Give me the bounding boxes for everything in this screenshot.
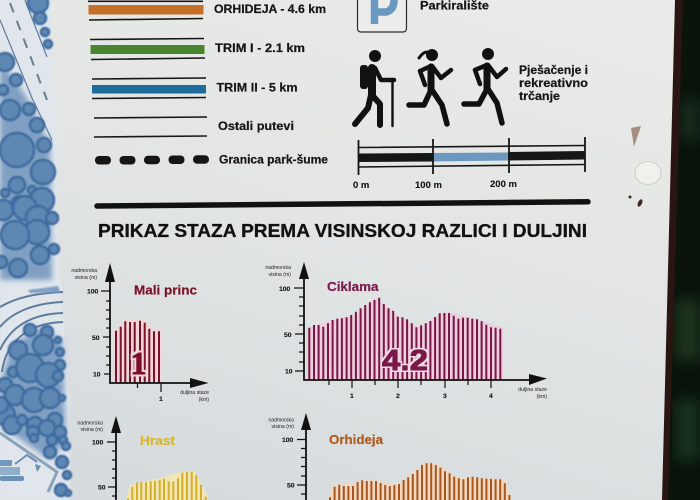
axes <box>77 416 121 500</box>
icon: female runner <box>409 49 451 124</box>
chart: Orhideja <box>268 413 512 500</box>
legend: Ostali putevi: Ostali putevi <box>218 121 294 133</box>
panel: walking and running <box>355 48 588 126</box>
axes: 100 <box>92 440 104 446</box>
icon: hiker <box>355 50 394 126</box>
axes <box>265 262 547 400</box>
scale bar <box>353 137 585 191</box>
axes: 4 <box>489 393 493 400</box>
scale bar: 100 m <box>415 180 442 191</box>
chart: Mali princ <box>71 263 209 403</box>
axes: visina (m) <box>75 275 97 281</box>
legend: Granica park-šume <box>95 154 328 166</box>
legend: Trim I <box>90 38 305 60</box>
scale bar: 0 m <box>353 180 369 191</box>
legend: Trim I: TRIM I - 2.1 km <box>215 43 305 55</box>
axes: nadmorska <box>265 265 291 271</box>
axes: nadmorska <box>77 420 103 426</box>
trail length: 4.2 <box>382 345 428 377</box>
axes: nadmorska <box>268 418 294 424</box>
axes: (km) <box>537 394 547 400</box>
chart: Ciklama <box>265 262 547 400</box>
parking label: Parkiralište <box>420 0 489 12</box>
map trees <box>0 0 71 496</box>
panel: map excerpt <box>0 0 71 500</box>
icon: excavator <box>0 455 41 481</box>
icon: parking sign <box>358 0 406 32</box>
axes <box>71 263 209 403</box>
axes: duljina staze <box>180 390 209 396</box>
panel: walking and running: rekreativno <box>519 78 588 90</box>
axes: 50 <box>92 335 100 342</box>
panel: walking and running: trčanje <box>519 91 560 103</box>
legend: Trim II <box>92 78 298 98</box>
axes: visina (m) <box>269 272 291 278</box>
axes: 10 <box>93 372 101 378</box>
axes: duljina staze <box>518 387 547 393</box>
axes: 50 <box>98 484 106 492</box>
legend: Trim II: TRIM II - 5 km <box>216 82 298 94</box>
scale bar: 200 m <box>490 179 517 190</box>
chart title: Hrast <box>140 434 176 448</box>
axes: 1 <box>350 393 354 400</box>
axes: 10 <box>285 368 293 376</box>
axes: 2 <box>396 393 400 400</box>
panel: trail legend <box>88 1 328 166</box>
rivet and stains <box>628 126 661 207</box>
label: activity: Pješačenje i <box>519 65 588 77</box>
axes: 50 <box>287 482 295 490</box>
axes <box>268 413 311 500</box>
map roads <box>0 0 63 492</box>
map tree mass <box>0 60 66 460</box>
chart title: Orhideja <box>329 433 384 447</box>
divider bar <box>97 202 588 206</box>
axes: (km) <box>199 397 209 403</box>
chart: Hrast <box>77 416 208 500</box>
axes: 100 <box>87 288 99 296</box>
panel: parking <box>358 0 489 32</box>
axes: 50 <box>284 332 292 339</box>
axes: visina (m) <box>272 424 294 430</box>
axes: nadmorska <box>71 268 97 274</box>
chart title: Mali princ <box>134 284 197 298</box>
legend: Granica park-šume: Granica park-šume <box>219 154 328 166</box>
axes: 100 <box>279 286 291 293</box>
icon: male runner <box>464 48 506 123</box>
legend: Orhideja: ORHIDEJA - 4.6 km <box>214 4 326 16</box>
axes: 3 <box>443 393 447 400</box>
legend: Orhideja <box>88 1 326 20</box>
axes: 1 <box>159 396 163 403</box>
axes: visina (m) <box>81 427 103 433</box>
heading: PRIKAZ STAZA PREMA VISINSKOJ RAZLICI I DULJINI <box>98 221 587 241</box>
sign frame edge <box>661 0 683 500</box>
trail length: 1 <box>130 345 146 381</box>
axes: 100 <box>282 437 294 444</box>
chart title: Ciklama <box>327 280 380 294</box>
